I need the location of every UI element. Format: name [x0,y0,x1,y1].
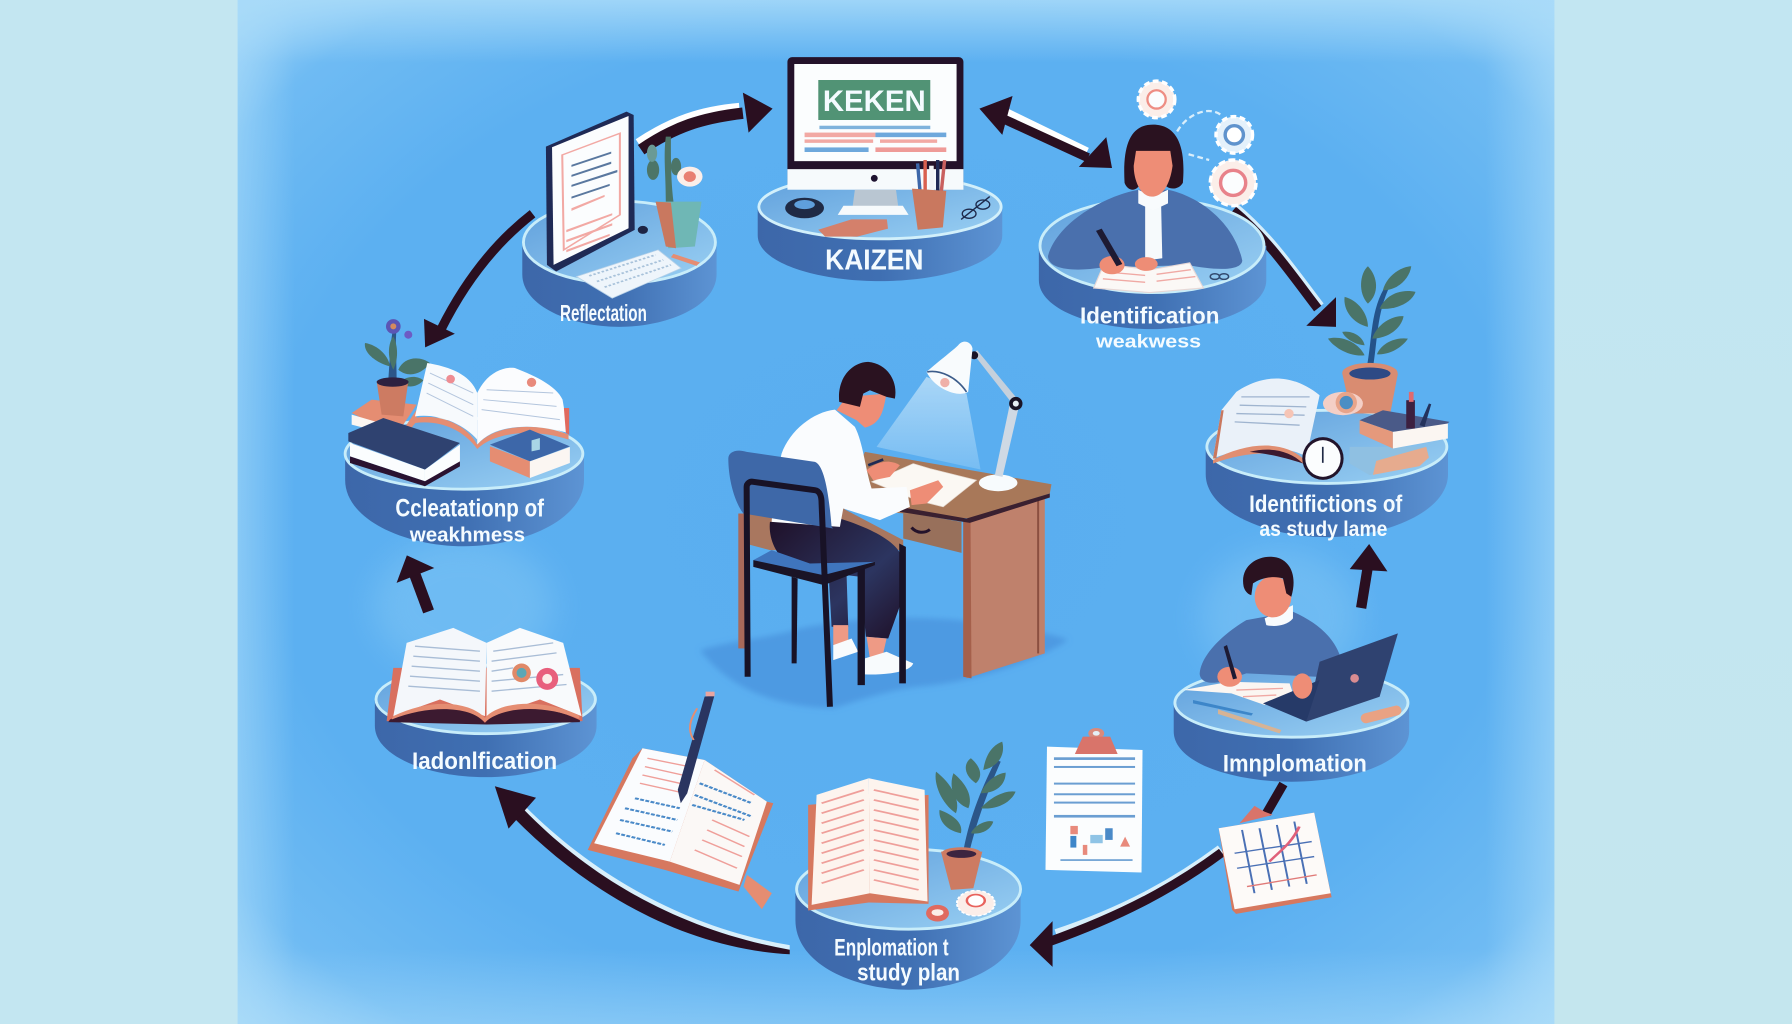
label: Ccleatationp of weakhmess [395,495,545,547]
station: indonification [375,628,597,777]
label: Identification weakness: Identification [1080,302,1219,328]
icon: chart paper [1219,806,1332,914]
lamp [877,342,1022,491]
platform [1206,410,1448,537]
label: Ccleatationp of weakhmess: weakhmess [409,524,525,547]
arrow: reflectation to kaizen [639,93,773,150]
station: identifications of a study plan [1206,266,1450,541]
icon: flower pot, books and open book [348,319,570,486]
desk [738,452,1051,678]
label: KAIZEN: KAIZEN [825,245,923,277]
label: Imnplomation: Imnplomation [1223,750,1367,777]
label: Identifictions of as study lame: Identifictions of [1249,491,1403,518]
label: Enplomation t study plan: study plan [857,960,960,987]
arrow: identification to study plan [1233,208,1336,327]
platform [1174,669,1409,782]
platform [345,418,584,546]
icon: woman writing [1048,125,1242,293]
platform [1039,199,1266,329]
label: Enplomation t study plan [834,934,960,987]
icon: clipboard report [1045,728,1143,873]
icon: plant, open book, clock and stacked books [1213,266,1450,480]
station: implementation [1174,557,1409,782]
student [770,362,943,675]
platform [522,201,717,327]
arrow: indonification up to celebration [397,555,434,611]
station: reflectation [522,112,717,327]
label: Enplomation t study plan: Enplomation t [834,934,949,961]
platform [758,175,1002,281]
label: Identifictions of as study lame [1249,491,1403,541]
station: identification weakness [1039,81,1266,351]
platform [795,849,1021,990]
chair back leg [792,577,798,663]
floor shadow [700,618,1068,708]
station: celebration of weakness [345,319,584,547]
arrow: double-headed kaizen to identification [979,96,1112,168]
icon: monitor with KEKEN screen [787,57,963,215]
arrow: employment plan to indonification [495,786,790,954]
icon: open book, plant and gears [808,742,1016,922]
station: kaizen [758,57,1002,281]
arrow: celebration to reflectation [424,214,533,347]
arrow: implementation up to study plan [1350,544,1387,608]
label: Identification weakness [1080,302,1219,351]
center: student at desk with lamp [700,342,1068,708]
icon: student with laptop [1183,557,1402,733]
open book [872,464,977,507]
icon: open book with gears [387,628,583,724]
icon: pencil cup and desk items [785,160,990,237]
platform [375,665,597,777]
icon: tablet, keyboard and plant [546,112,703,298]
chair [728,451,906,707]
icon: gears [1138,81,1256,206]
label: Iadonlfication: Iadonlfication [412,748,557,775]
background: central blue panel [238,0,1554,1024]
station: enplomation study plan [795,742,1021,990]
label: Identifictions of as study lame: as study lame [1259,516,1387,541]
label: Reflectation: Reflectation [560,300,647,326]
label: Identification weakness: weakwess [1095,330,1201,351]
screen word: KEKEN [823,85,926,118]
arrow: implementation to employment plan [1030,784,1283,967]
icon: annotated open book with pen [588,692,773,909]
label: Ccleatationp of weakhmess: Ccleatationp of [395,495,545,523]
